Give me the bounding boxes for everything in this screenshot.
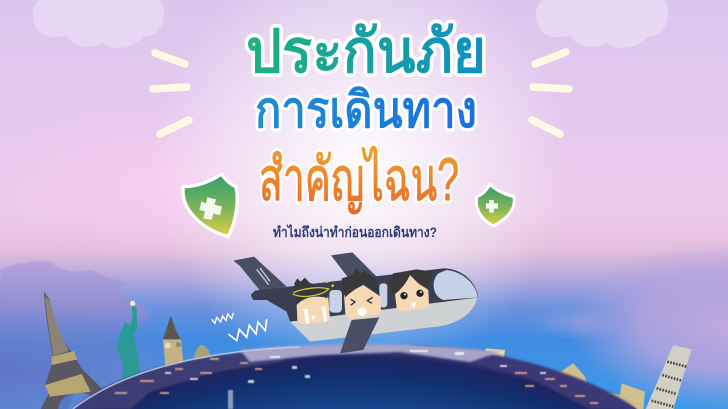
tail fin — [233, 257, 287, 291]
icon: Big Ben — [163, 316, 184, 370]
title line 1: ประกันภัย — [246, 18, 486, 85]
globe — [73, 344, 637, 409]
cabin window 2 — [379, 283, 387, 307]
title line 1: ประกันภัย — [246, 18, 486, 85]
icon: palace — [503, 362, 645, 409]
decorative cloud top right — [536, 0, 668, 48]
title line 2: การเดินทาง — [255, 82, 477, 138]
fuselage lower — [290, 297, 477, 342]
icon: dome left — [194, 345, 211, 361]
shouting passenger — [342, 268, 381, 319]
wing stripes — [257, 268, 270, 285]
crying passenger — [293, 278, 335, 324]
title line 3: สำคัญไฉน? — [259, 145, 459, 214]
icon: shield right — [476, 184, 514, 226]
lower wing — [340, 317, 379, 353]
cockpit window — [434, 270, 478, 300]
cabin window 1 — [329, 290, 342, 313]
title line 3: สำคัญไฉน? — [259, 145, 459, 214]
icon: shake marks — [212, 313, 267, 341]
icon: temple — [483, 348, 505, 362]
decorative cloud top left — [33, 0, 164, 48]
upper wing — [331, 252, 377, 280]
icon: Statue of Liberty — [117, 301, 141, 385]
airplane — [233, 252, 478, 353]
icon: Eiffel tower — [41, 292, 105, 409]
globe coast lights left — [73, 349, 300, 409]
icon: cross — [199, 197, 222, 220]
clouds right — [530, 241, 728, 409]
subtitle: ทำไมถึงน่าทำก่อนออกเดินทาง? — [273, 223, 437, 240]
icon: shield left — [183, 174, 237, 237]
title line 3 — [259, 145, 459, 214]
calm passenger — [388, 269, 433, 311]
icon: leaning tower of Pisa — [646, 345, 692, 409]
right landmarks — [483, 345, 692, 409]
sparkle lines left — [153, 53, 189, 134]
fuselage upper — [251, 268, 478, 322]
sparkle lines right — [532, 52, 569, 134]
clouds left — [0, 260, 210, 409]
globe coast lights right — [410, 345, 637, 409]
title line 2: การเดินทาง — [255, 82, 477, 138]
icon: small cross — [486, 200, 498, 213]
